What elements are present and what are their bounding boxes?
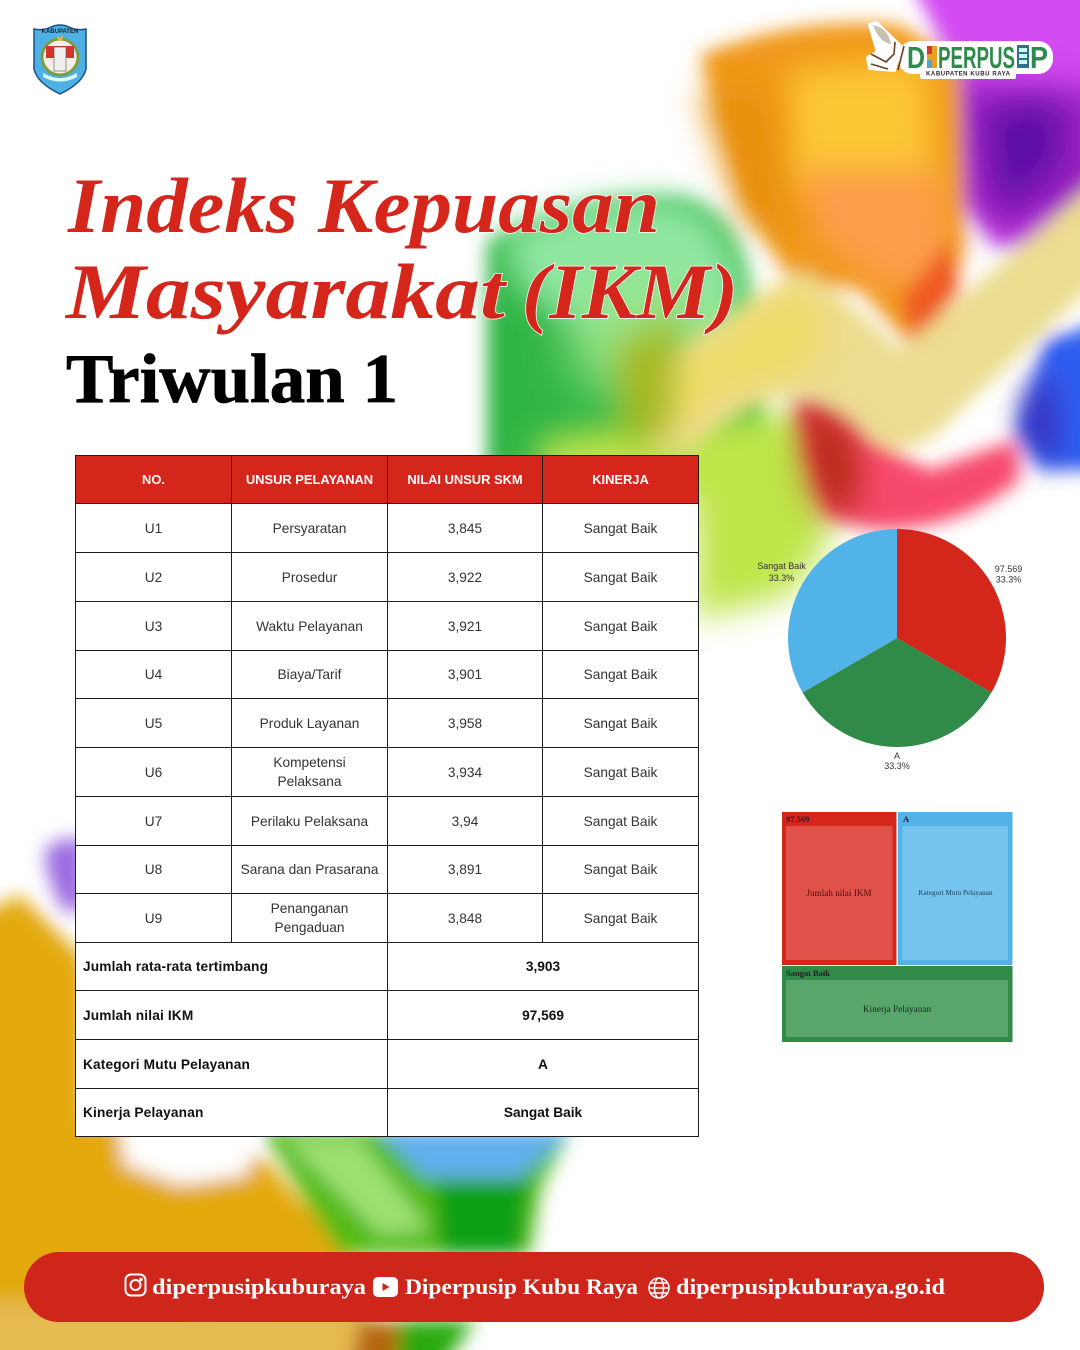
table: nilai unsur pelayanan: Sangat Baik — [584, 667, 657, 682]
purple — [905, 0, 1080, 250]
table: nilai unsur pelayanan: Waktu Pelayanan — [256, 618, 363, 634]
logo: Diperpusip: KABUPATEN KUBU RAYA — [926, 72, 1011, 78]
pie label: Sangat Baik: Sangat Baik — [757, 561, 806, 571]
table: nilai unsur pelayanan: Jumlah rata-rata tertimbang — [83, 959, 268, 974]
logo: Kabupaten Kubu Raya crest: KABUPATEN — [42, 29, 78, 35]
treemap cell: Kategori Mutu Pelayanan — [898, 812, 1012, 965]
table: nilai unsur pelayanan: 3,845 — [448, 520, 482, 536]
footer handle: instagram: diperpusipkuburaya — [152, 1274, 366, 1299]
table: nilai unsur pelayanan: Jumlah nilai IKM — [83, 1008, 193, 1022]
treemap cell: Kinerja Pelayanan: Sangat Baik — [786, 968, 830, 978]
table: nilai unsur pelayanan: 3,94 — [452, 814, 478, 828]
table: nilai unsur pelayanan — [75, 455, 699, 1137]
treemap cell: Jumlah nilai IKM: Jumlah nilai IKM — [806, 888, 872, 898]
lower greens — [262, 1130, 570, 1255]
table: nilai unsur pelayanan: Prosedur — [282, 570, 337, 584]
table: nilai unsur pelayanan: Kategori Mutu Pelayanan — [83, 1056, 250, 1072]
table: nilai unsur pelayanan: Persyaratan — [273, 520, 346, 536]
treemap cell: Jumlah nilai IKM — [782, 812, 896, 965]
table: nilai unsur pelayanan: UNSUR PELAYANAN — [246, 472, 373, 487]
title line 1: Kepuasan — [317, 162, 660, 249]
table: nilai unsur pelayanan: U4 — [145, 667, 162, 682]
table: nilai unsur pelayanan: Sangat Baik — [584, 520, 657, 536]
table: nilai unsur pelayanan: U5 — [145, 716, 162, 730]
table: nilai unsur pelayanan: KINERJA — [592, 472, 649, 487]
title — [64, 162, 738, 418]
title line 2 — [64, 248, 738, 335]
table: nilai unsur pelayanan: Sangat Baik — [504, 1105, 582, 1120]
pie chart — [757, 529, 1022, 771]
table: nilai unsur pelayanan: U1 — [145, 520, 162, 536]
table: nilai unsur pelayanan: Sangat Baik — [584, 618, 657, 634]
table: nilai unsur pelayanan: NILAI UNSUR SKM — [407, 472, 523, 487]
table: nilai unsur pelayanan: U2 — [145, 570, 162, 584]
icon: globe — [649, 1278, 669, 1298]
pie label: 97.569: 33.3% — [996, 574, 1021, 584]
red — [795, 400, 1020, 530]
table: nilai unsur pelayanan: U3 — [145, 618, 162, 634]
table: nilai unsur pelayanan: Pengaduan — [274, 920, 345, 935]
table: nilai unsur pelayanan: Sangat Baik — [584, 910, 657, 926]
pie label: A: 33.3% — [884, 761, 910, 771]
table: nilai unsur pelayanan: A — [538, 1056, 548, 1072]
cream band — [650, 170, 1080, 450]
table: nilai unsur pelayanan: Sangat Baik — [584, 570, 657, 584]
treemap cell: Kinerja Pelayanan — [782, 966, 1012, 1042]
table: nilai unsur pelayanan: Kinerja Pelayanan — [83, 1105, 203, 1120]
table: nilai unsur pelayanan: U7 — [145, 814, 162, 828]
logo: Kabupaten Kubu Raya crest — [33, 24, 87, 95]
title line 1 — [67, 162, 660, 249]
table: nilai unsur pelayanan: Biaya/Tarif — [278, 667, 341, 682]
table: nilai unsur pelayanan: U6 — [145, 764, 162, 780]
blue — [1015, 320, 1080, 470]
table: nilai unsur pelayanan: U9 — [145, 910, 162, 926]
pie label: A: A — [894, 751, 900, 761]
title line 2: Masyarakat — [64, 248, 508, 335]
orange — [700, 23, 965, 345]
table: nilai unsur pelayanan: Sarana dan Prasarana — [241, 862, 378, 877]
logo: Diperpusip: P — [1030, 40, 1048, 75]
table: nilai unsur pelayanan: Perilaku Pelaksana — [251, 814, 368, 828]
treemap chart — [782, 812, 1012, 1042]
table: nilai unsur pelayanan: NO. — [142, 472, 165, 487]
icon: instagram — [126, 1274, 146, 1296]
pie label: Sangat Baik: 33.3% — [769, 573, 794, 583]
treemap cell: Kinerja Pelayanan: Kinerja Pelayanan — [863, 1004, 932, 1014]
table: nilai unsur pelayanan: 3,922 — [448, 570, 482, 584]
table: nilai unsur pelayanan: Sangat Baik — [584, 764, 657, 780]
table: nilai unsur pelayanan: 3,848 — [448, 910, 482, 926]
table: nilai unsur pelayanan: Penanganan — [271, 901, 348, 916]
table: nilai unsur pelayanan: Pelaksana — [278, 774, 341, 789]
lime — [540, 410, 830, 620]
table: nilai unsur pelayanan: 3,891 — [448, 862, 482, 877]
table: nilai unsur pelayanan: U8 — [145, 862, 162, 877]
table: nilai unsur pelayanan: Sangat Baik — [584, 716, 657, 730]
treemap cell: Jumlah nilai IKM: 97.569 — [786, 814, 809, 824]
green — [487, 195, 770, 470]
treemap cell: Kategori Mutu Pelayanan: Kategori Mutu Pelayanan — [918, 890, 993, 897]
footer bar — [24, 1252, 1044, 1322]
pie label: 97.569: 97.569 — [995, 564, 1022, 574]
table: nilai unsur pelayanan: 3,958 — [448, 716, 482, 730]
footer website: diperpusipkuburaya.go.id — [676, 1274, 946, 1299]
table: nilai unsur pelayanan: 97,569 — [522, 1008, 564, 1022]
subtitle: Triwulan 1 — [66, 341, 398, 418]
table: nilai unsur pelayanan: Kompetensi — [273, 755, 346, 770]
table: nilai unsur pelayanan: Produk Layanan — [260, 716, 359, 730]
table: nilai unsur pelayanan: 3,903 — [526, 959, 560, 974]
icon: youtube — [373, 1277, 398, 1297]
logo: Diperpusip: D — [907, 40, 925, 75]
table: nilai unsur pelayanan: Sangat Baik — [584, 862, 657, 877]
footer handle: youtube: Diperpusip Kubu Raya — [405, 1274, 638, 1299]
table: nilai unsur pelayanan: 3,901 — [448, 667, 482, 682]
lower left yellow — [0, 895, 390, 1350]
table: nilai unsur pelayanan: 3,934 — [448, 764, 482, 780]
title line 1: Indeks — [67, 162, 298, 249]
title line 2: (IKM) — [522, 248, 738, 335]
table: nilai unsur pelayanan: 3,921 — [448, 618, 482, 634]
table: nilai unsur pelayanan: Sangat Baik — [584, 814, 657, 828]
logo: Diperpusip — [866, 21, 1053, 79]
treemap cell: Kategori Mutu Pelayanan: A — [903, 814, 910, 824]
